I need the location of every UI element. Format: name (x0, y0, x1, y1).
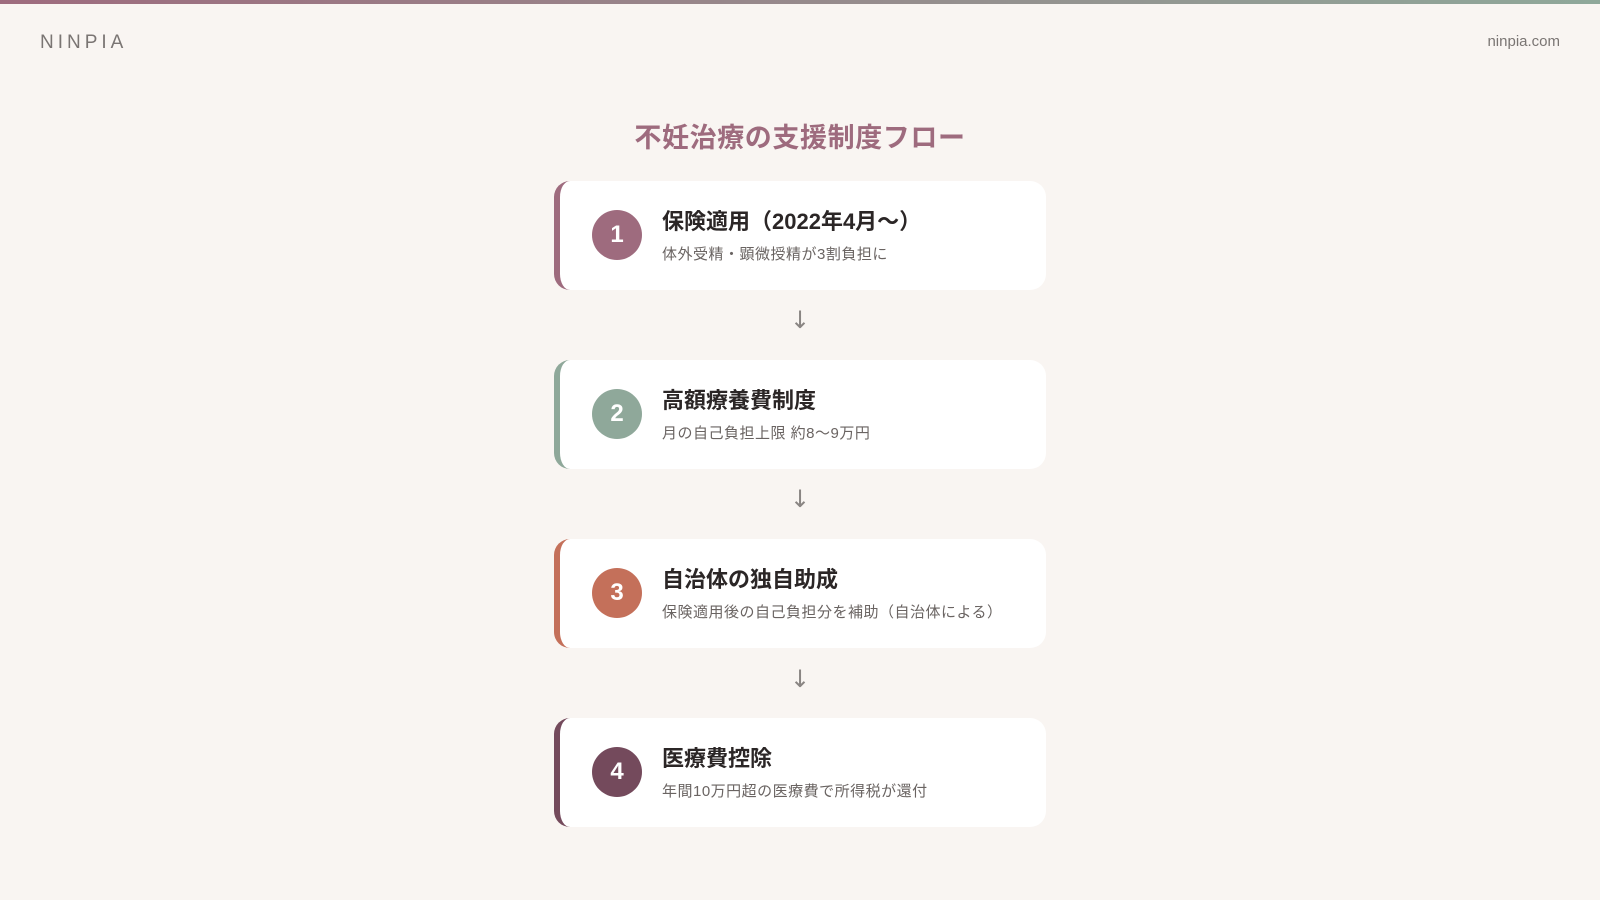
number 2 (592, 389, 642, 439)
text 4: 年間10万円超の医療費で所得税が還付 (662, 783, 928, 800)
text 2: 月の自己負担上限 約8〜9万円 (662, 425, 870, 442)
card 1 (554, 181, 1046, 290)
title: 不妊治療の支援制度フロー (634, 123, 966, 153)
number 1 (592, 210, 642, 260)
number 2: 2 (610, 400, 624, 427)
logo: NINPIA (40, 32, 127, 53)
number 4: 4 (610, 758, 624, 785)
heading 1: 保険適用（2022年4月〜） (662, 209, 921, 234)
arrow 1: ↓ (790, 306, 810, 334)
number 3: 3 (610, 579, 624, 606)
card 4 (554, 718, 1046, 827)
heading 2: 高額療養費制度 (662, 388, 816, 413)
heading 4: 医療費控除 (662, 746, 772, 771)
heading 3: 自治体の独自助成 (662, 567, 838, 592)
number 4 (592, 747, 642, 797)
arrow 2: ↓ (790, 485, 810, 513)
text 1: 体外受精・顕微授精が3割負担に (662, 246, 888, 263)
number 1: 1 (610, 221, 624, 248)
card 3 (554, 539, 1046, 648)
text 3: 保険適用後の自己負担分を補助（自治体による） (662, 604, 1003, 621)
number 3 (592, 568, 642, 618)
arrow 3: ↓ (790, 665, 810, 693)
card 2 (554, 360, 1046, 469)
url: ninpia.com (1487, 33, 1560, 50)
